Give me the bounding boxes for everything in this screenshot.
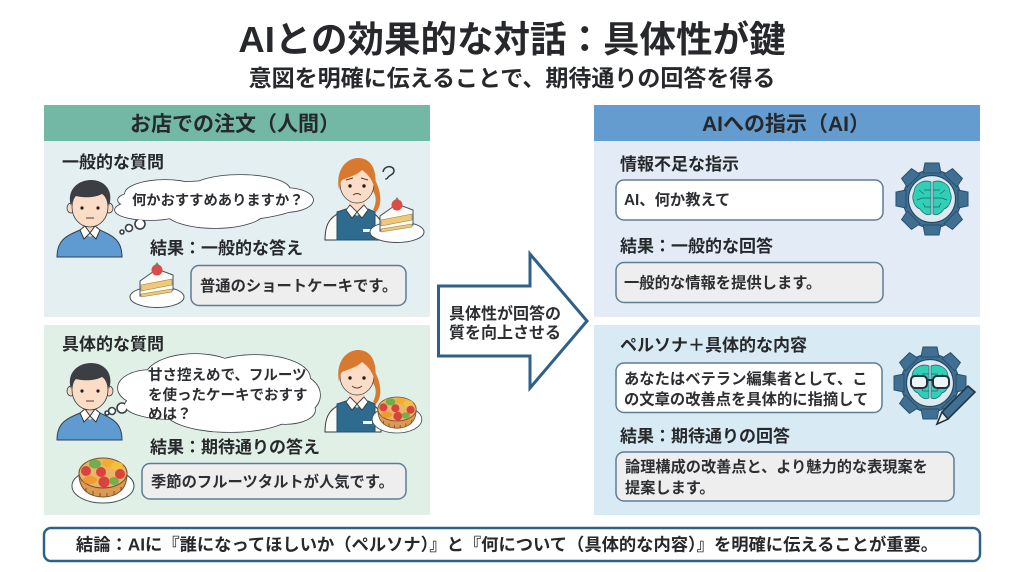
speech cloud: specific question	[105, 354, 320, 432]
prompt box: persona	[616, 363, 882, 412]
answer box: general: 一般的な情報を提供します。	[624, 274, 821, 292]
icon: customer	[57, 363, 122, 440]
speech cloud: specific question: 甘さ控えめで、フルーツ	[148, 367, 307, 384]
heading: specific question: 具体的な質問	[62, 335, 164, 354]
answer box: fruit tart	[142, 464, 406, 499]
prompt box: persona: の文章の改善点を具体的に指摘して	[624, 390, 868, 408]
heading: human ordering: お店での注文（人間）	[130, 113, 340, 136]
answer box: short cake	[191, 266, 406, 306]
conclusion banner	[44, 528, 980, 561]
panel: human ordering	[44, 105, 430, 515]
heading: insufficient instruction: 情報不足な指示	[620, 155, 739, 174]
conclusion banner: 結論：AIに『誰になってほしいか（ペルソナ）』と『何について（具体的な内容）』を明確に伝えることが重要。	[76, 534, 938, 554]
icon: fruit tart	[72, 458, 134, 503]
title: AIとの効果的な対話：具体性が鍵	[238, 19, 786, 60]
heading: expected result: 結果：期待通りの答え	[150, 437, 320, 457]
speech cloud: general question	[115, 175, 313, 234]
speech cloud: specific question: を使ったケーキでおすす	[148, 386, 308, 404]
heading: general result: 結果：一般的な答え	[150, 238, 303, 258]
arrow: specificity improves answers: 具体性が回答の	[449, 304, 561, 323]
speech cloud: general question: 何かおすすめありますか？	[132, 191, 304, 209]
icon: smiling waitress with tart	[325, 350, 422, 433]
heading: human ordering	[44, 105, 430, 141]
heading: general question: 一般的な質問	[62, 153, 164, 172]
answer box: general	[616, 262, 883, 302]
answer box: short cake: 普通のショートケーキです。	[200, 277, 397, 295]
heading: persona and specifics: ペルソナ＋具体的な内容	[620, 335, 807, 355]
icon: gear with brain	[896, 163, 968, 235]
icon: short cake	[130, 262, 184, 308]
arrow: specificity improves answers	[438, 254, 587, 388]
arrow: specificity improves answers: 質を向上させる	[449, 324, 561, 342]
heading: AI instructions: AIへの指示（AI）	[702, 113, 870, 136]
panel: AI instructions	[594, 105, 980, 515]
panel: persona and specifics	[594, 325, 980, 515]
answer box: fruit tart: 季節のフルーツタルトが人気です。	[151, 473, 394, 491]
answer box: improvements	[616, 452, 954, 501]
panel: insufficient instruction	[594, 141, 980, 317]
answer box: improvements: 提案します。	[625, 479, 715, 497]
subtitle: 意図を明確に伝えることで、期待通りの回答を得る	[249, 65, 775, 91]
icon: confused waitress with cake	[325, 158, 424, 242]
heading: AI instructions	[594, 105, 980, 141]
prompt box: persona: あなたはベテラン編集者として、こ	[624, 370, 868, 388]
icon: gear with brain, glasses and pen	[894, 347, 975, 424]
speech cloud: specific question: めは？	[148, 406, 192, 423]
heading: general answer: 結果：一般的な回答	[620, 236, 773, 256]
icon: customer	[57, 180, 122, 257]
panel: specific question	[44, 325, 430, 515]
prompt box: vague: AI、何か教えて	[624, 191, 730, 209]
prompt box: vague	[616, 180, 883, 220]
answer box: improvements: 論理構成の改善点と、より魅力的な表現案を	[625, 458, 928, 476]
panel: general question	[44, 141, 430, 317]
heading: expected answer: 結果：期待通りの回答	[620, 426, 790, 446]
